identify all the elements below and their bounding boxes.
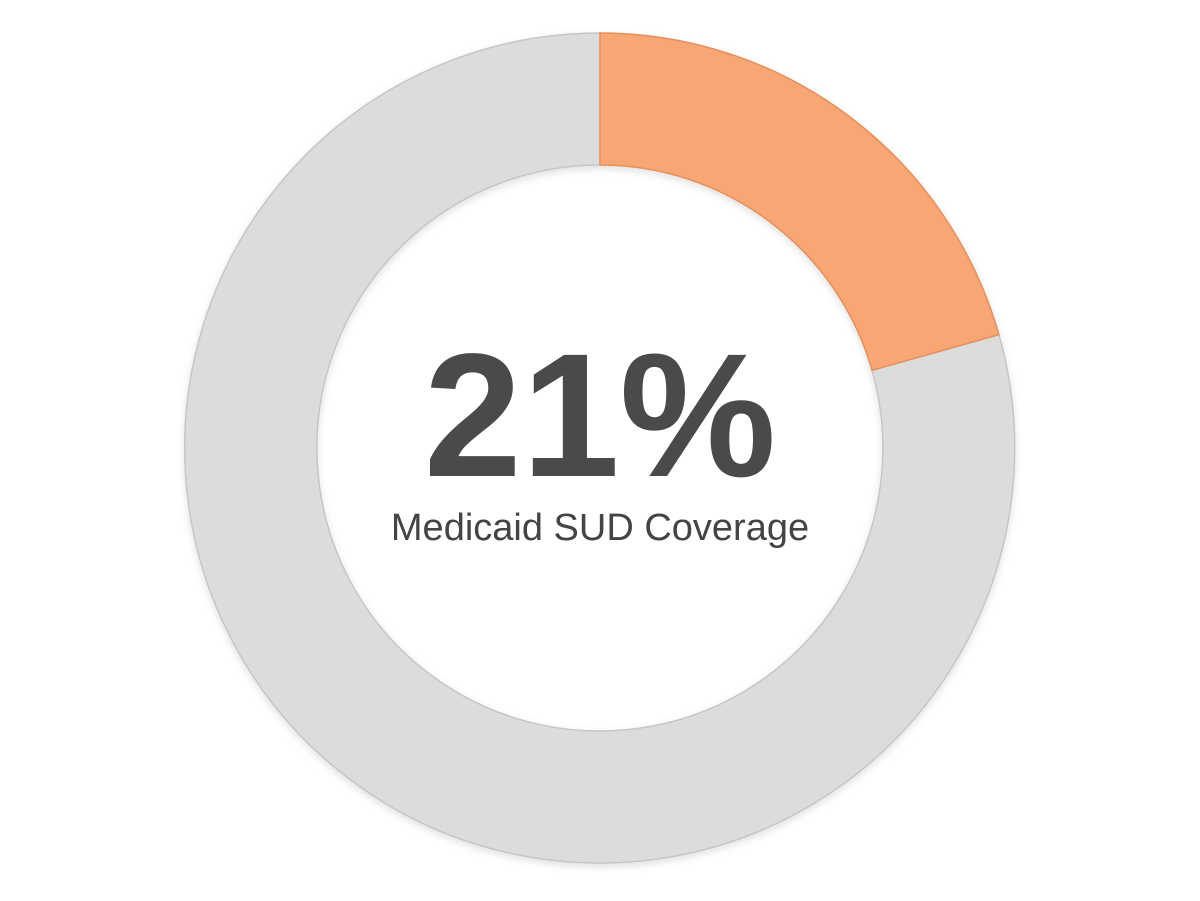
center label: Medicaid SUD Coverage xyxy=(391,507,809,549)
donut ring xyxy=(185,33,1015,863)
center value: 21%: 21% xyxy=(424,318,776,514)
segment: remaining 79% (gray) xyxy=(185,33,1015,863)
segment: 21% (orange) xyxy=(600,33,999,370)
